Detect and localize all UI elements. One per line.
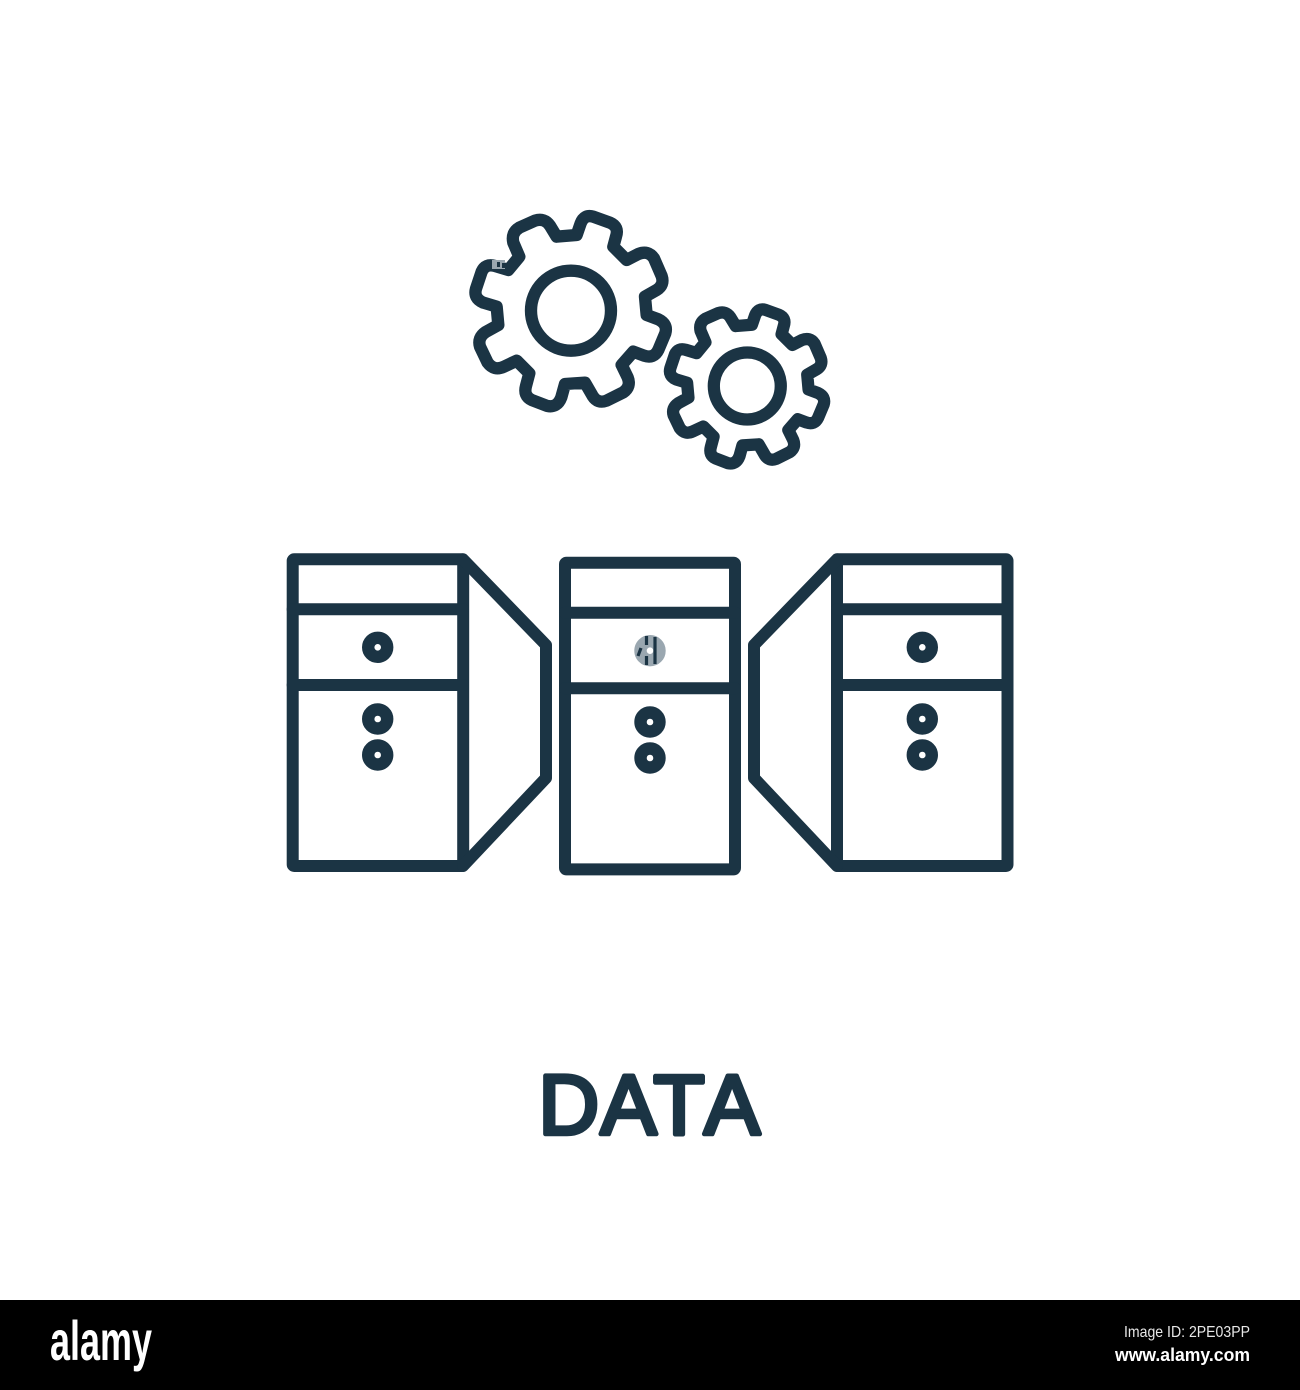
side panel bbox=[463, 559, 546, 866]
watermark fragment on gear bbox=[492, 260, 505, 269]
gear hub bbox=[531, 271, 611, 351]
side panel bbox=[754, 559, 837, 866]
icon: large gear bbox=[475, 216, 666, 406]
footer bar bbox=[0, 1300, 1300, 1390]
indicator lights bbox=[913, 638, 932, 764]
icon: right server bbox=[754, 559, 1008, 866]
website: www.alamy.com bbox=[1114, 1345, 1250, 1365]
gear hub bbox=[714, 353, 781, 419]
footer logo: alamy bbox=[50, 1309, 152, 1372]
indicator lights bbox=[638, 636, 660, 768]
title: DATA bbox=[538, 1058, 760, 1152]
icon: left server bbox=[293, 559, 546, 866]
icon: centre server bbox=[565, 563, 735, 869]
image id: Image ID: 2PE03PP bbox=[1124, 1324, 1250, 1341]
indicator lights bbox=[368, 638, 387, 764]
icon: gears bbox=[475, 216, 824, 463]
icon: small gear bbox=[670, 309, 824, 463]
